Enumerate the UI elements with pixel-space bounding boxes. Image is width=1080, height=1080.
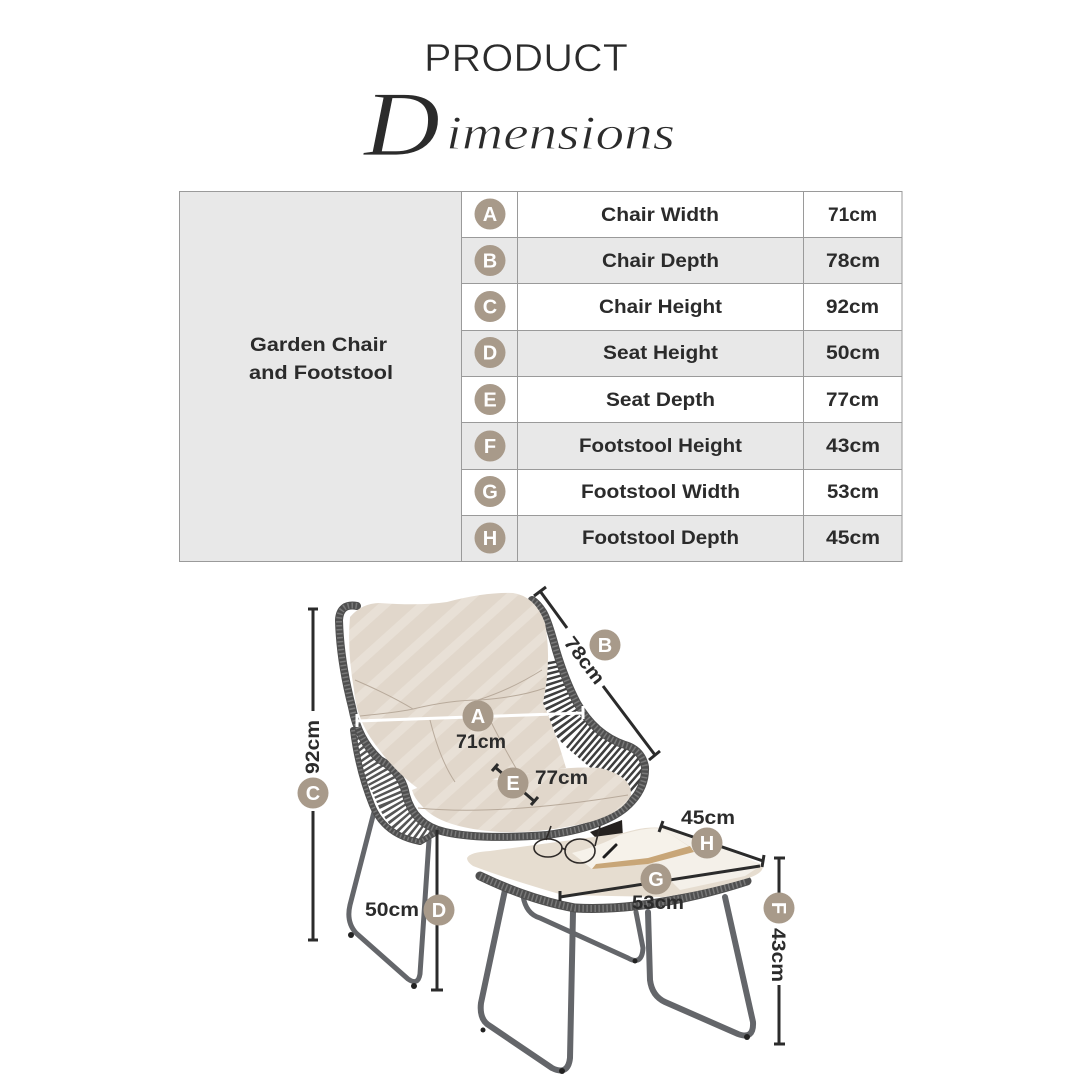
chair seat cushion [412,768,631,832]
row E: Seat Depth [606,390,715,411]
footstool rattan tray [480,876,747,908]
table grid [180,192,902,562]
measure G: footstool width: G [648,869,664,891]
measure B: chair depth: B [598,635,612,657]
row F [474,430,880,462]
left arm weave [352,735,432,840]
measure E: seat depth [492,764,588,805]
row C [474,291,879,322]
measure H: footstool depth: 45cm [681,808,735,829]
measure B: chair depth [534,587,660,760]
measure D: seat height: 50cm [365,900,419,921]
row C: C [483,296,497,318]
chair feet [348,932,417,989]
shadow under seat [590,820,623,846]
footstool back legs [523,896,643,960]
row C: Chair Height [599,297,723,318]
row D [474,337,880,368]
row A [474,198,877,230]
title [362,37,675,175]
row E: 77cm [826,390,879,411]
cushion highlight [650,829,762,890]
measure D: seat height [365,830,454,990]
row G: Footstool Width [581,482,740,503]
row H: Footstool Depth [582,528,739,549]
dimensions table [180,192,902,562]
open book [572,828,694,869]
glasses [534,826,600,863]
row G: G [482,482,498,504]
row A: A [483,204,497,226]
title line: Dimensions: D [362,73,440,175]
footstool cushion [467,828,763,897]
measure A: chair width [357,700,583,753]
product illustration: chair and footstool [339,593,763,1074]
row D: 50cm [826,343,880,364]
measure D: seat height: D [432,900,446,922]
row shading [180,192,902,562]
measure B: chair depth: 78cm [559,633,608,689]
row G: 53cm [827,482,879,503]
row E [474,384,879,415]
measure E: seat depth: 77cm [535,768,588,789]
row H: 45cm [826,528,880,549]
row F: Footstool Height [579,436,743,457]
row H [474,522,880,554]
measure H: footstool depth: H [700,833,714,855]
row F: F [484,436,496,458]
chair legs [349,812,429,982]
measure F: footstool height [764,858,794,1044]
row A: 71cm [828,205,877,226]
cushion folds [355,670,628,810]
product name cell: Garden Chair [250,335,388,356]
measure C: chair height: 92cm [303,720,324,774]
measure C: chair height [298,609,328,940]
row E: E [483,390,497,412]
chair rattan frame [339,600,645,842]
measure F: footstool height: F [767,902,789,914]
measure G: footstool width [560,864,760,914]
measure A: chair width: 71cm [456,732,506,753]
row D: D [483,342,497,364]
footstool front legs [481,890,753,1070]
row C: 92cm [826,297,879,318]
title line: PRODUCT: PRODUCT [424,37,628,80]
row F: 43cm [826,436,880,457]
measure A: chair width: A [471,706,485,728]
pen [604,845,616,857]
row A: Chair Width [601,205,719,226]
row B: B [483,250,497,272]
title line: Dimensions: imensions [446,107,675,160]
row B: 78cm [826,251,880,272]
product name cell [249,335,393,384]
measure C: chair height: C [306,783,320,805]
row D: Seat Height [603,343,719,364]
product name cell: and Footstool [249,363,393,384]
chair back cushion [349,593,566,790]
row B [474,245,880,276]
row G [474,476,879,507]
measure G: footstool width: 53cm [632,893,684,914]
measure H: footstool depth [659,808,764,867]
row H: H [483,528,497,550]
chair side weave [548,662,644,785]
footstool feet [480,958,750,1074]
measure E: seat depth: E [506,773,520,795]
row B: Chair Depth [602,251,719,272]
measure F: footstool height: 43cm [767,928,788,982]
